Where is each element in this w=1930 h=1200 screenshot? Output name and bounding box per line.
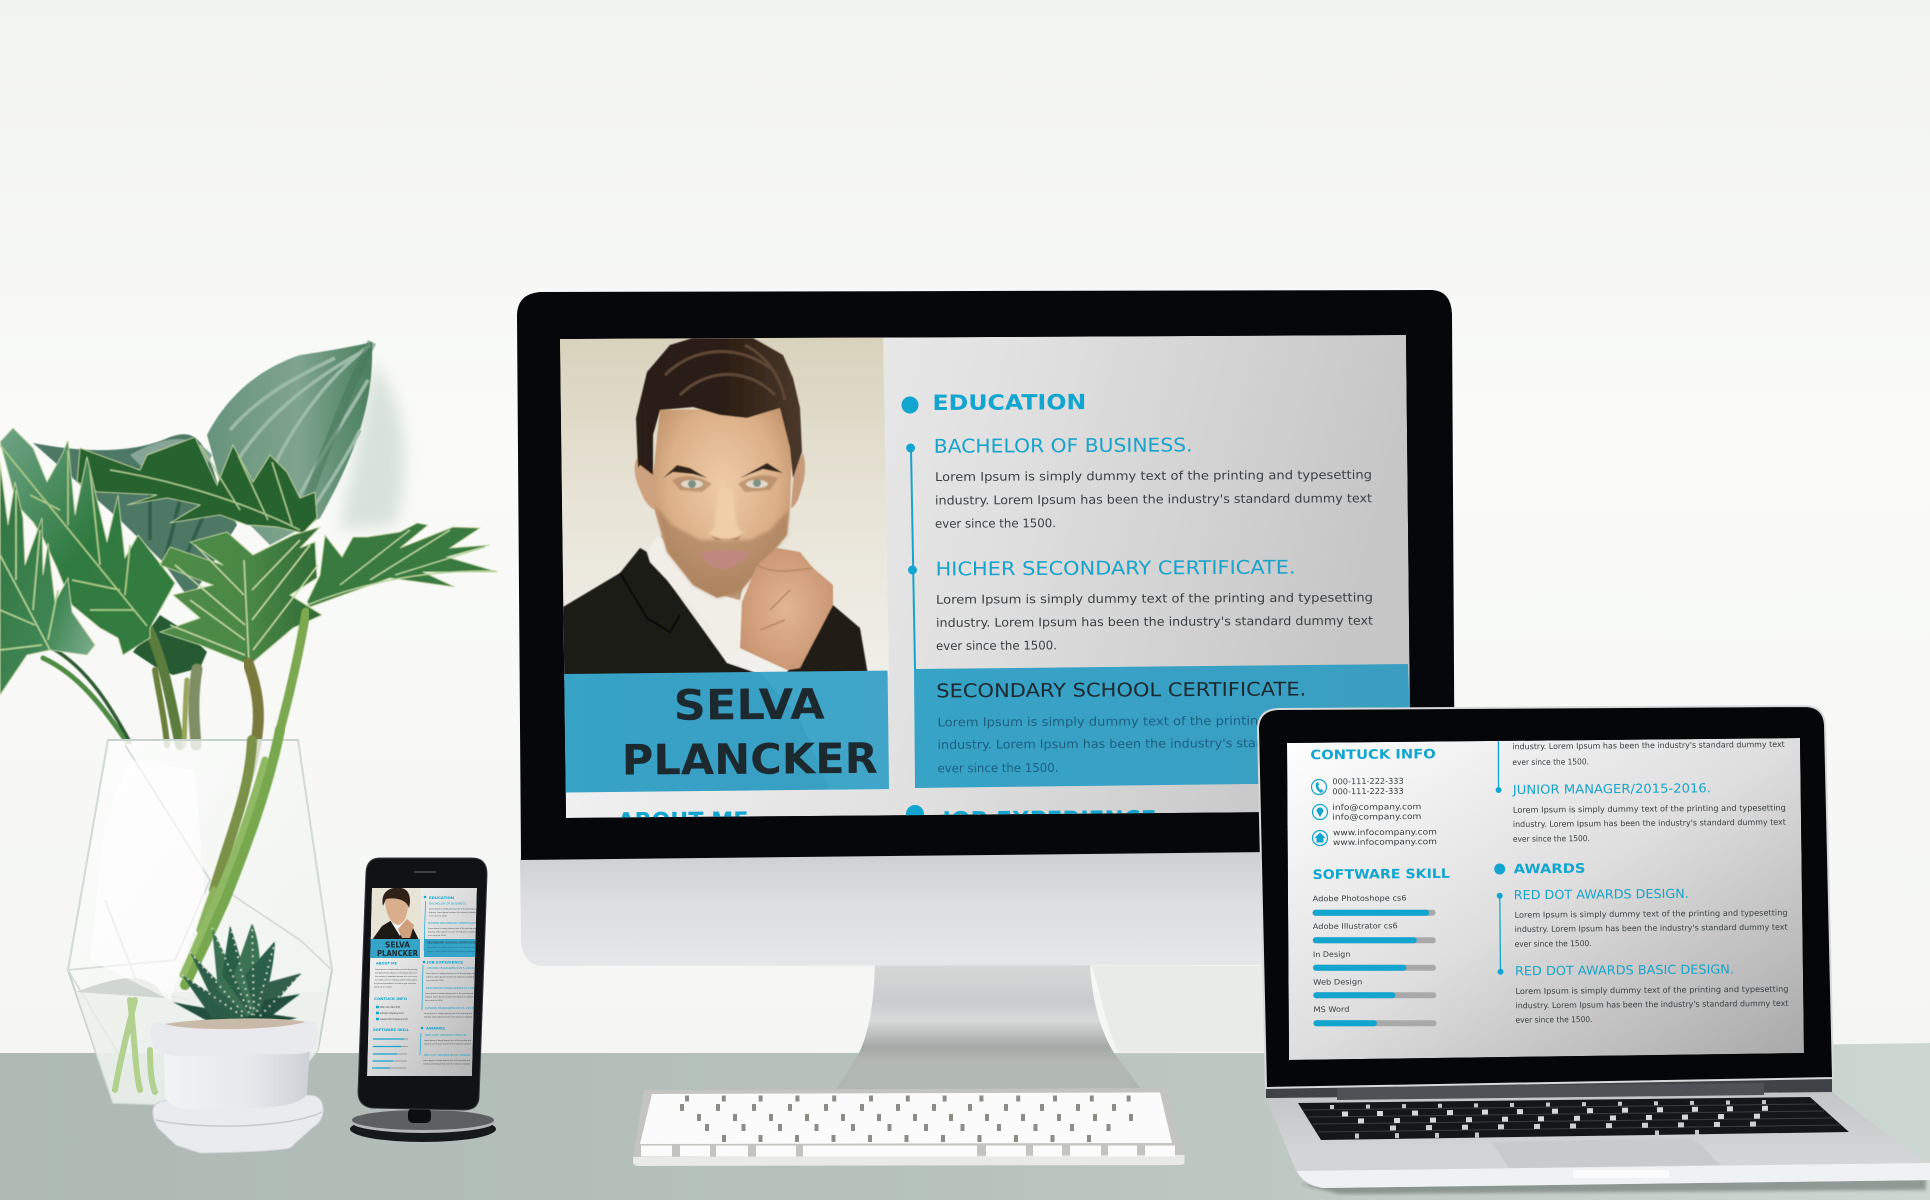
leaf: large left — [0, 428, 175, 655]
awards section: industry. Lorem Ipsum has been the industry's standard dummy text — [1515, 999, 1789, 1010]
awards section: industry. Lorem Ipsum has been the industry's standard dummy text — [1515, 923, 1788, 934]
icon: location — [1312, 804, 1328, 820]
skill: in design — [1313, 950, 1436, 971]
job experience continuation: JUNIOR MANAGER/2015-2016. — [1512, 780, 1711, 797]
leaf: center — [160, 527, 322, 663]
contact info: info@company.com — [1332, 802, 1422, 812]
portrait photo — [558, 336, 890, 680]
contact info — [1310, 747, 1437, 847]
mini right column: Lorem Ipsum is simply dummy text of the printing and — [426, 972, 475, 975]
stems — [43, 626, 197, 745]
monitor screen — [558, 335, 1412, 835]
icon: home — [1312, 830, 1328, 846]
mini right column: HICHER SECONDARY CERTIFICATE. — [428, 921, 477, 925]
neck shade — [660, 535, 742, 600]
mini right column: EDUCATION — [429, 896, 454, 900]
leaf: right — [307, 523, 498, 607]
face — [653, 408, 792, 598]
mini right column: ever since the 1500. — [425, 999, 443, 1002]
pot rim — [150, 1021, 318, 1056]
mini left column: Lorem Ipsum is simply dummy text of the printing — [375, 968, 418, 971]
mini right column: industry. Lorem Ipsum has been the industry's standard — [423, 1062, 471, 1066]
gravel — [165, 1018, 305, 1029]
awards section: Lorem Ipsum is simply dummy text of the printing and typesetting — [1515, 985, 1789, 996]
entry: bachelor: industry. Lorem Ipsum has been the industry's standard dummy text — [935, 491, 1372, 507]
awards section: ever since the 1500. — [1515, 1015, 1593, 1025]
entry: higher secondary — [936, 557, 1373, 653]
software skill: SOFTWARE SKILL — [1313, 867, 1450, 883]
skill: illustrator — [1313, 921, 1436, 943]
eyebrows — [663, 465, 707, 478]
skill: web design: Web Design — [1313, 977, 1363, 987]
laptop front lip — [1297, 1163, 1930, 1188]
job experience continuation — [1496, 740, 1786, 844]
mini right column: SECONDARY SCHOOL CERTIFICATE. — [427, 940, 477, 944]
entry: secondary school — [938, 682, 1304, 772]
keyboard front edge — [633, 1155, 1184, 1166]
mini right column: industry. Lorem Ipsum has been the industry's standard — [425, 996, 474, 998]
plant shadow on wall — [340, 362, 405, 530]
stems through glass — [183, 730, 280, 985]
leaf: far left — [0, 462, 95, 695]
mini name band — [370, 939, 420, 958]
awards section — [1494, 862, 1789, 1025]
laptop keyboard — [1298, 1097, 1849, 1140]
mini left column: book since 1500. — [374, 986, 392, 988]
job experience continuation: industry. Lorem Ipsum has been the industry's standard dummy text — [1512, 740, 1785, 751]
mini left column: ABOUT ME — [376, 962, 398, 966]
smartphone on dock — [350, 858, 496, 1142]
section heading: EDUCATION — [932, 390, 1086, 415]
icon: phone — [1312, 780, 1326, 794]
entry: higher secondary: Lorem Ipsum is simply dummy text of the printing and typesetting — [936, 590, 1373, 607]
entry: bachelor — [934, 434, 1372, 531]
trackpad — [1492, 1138, 1721, 1168]
mini left column: 000-111-222-333 — [380, 1006, 400, 1009]
contact info: 000-111-222-333 — [1332, 787, 1404, 796]
mockup scene — [0, 290, 1930, 1200]
mini left column: www.infocompany.com — [380, 1018, 409, 1021]
monitor chin — [520, 850, 1300, 966]
ears — [635, 458, 655, 510]
contact info: www.infocompany.com — [1333, 827, 1437, 837]
skill: ms word — [1313, 1005, 1436, 1026]
awards section: ever since the 1500. — [1515, 939, 1592, 949]
center hinge — [1337, 1083, 1764, 1100]
neck and shirt — [647, 535, 743, 662]
entry: higher secondary: industry. Lorem Ipsum has been the industry's standard dummy text — [936, 614, 1373, 630]
screen background — [560, 335, 1411, 818]
mini right column: Lorem Ipsum is simply dummy text of the printing and — [424, 1039, 472, 1042]
entry: secondary school: SECONDARY SCHOOL CERTIFICATE. — [936, 678, 1306, 702]
laptop table shadow — [1300, 1178, 1926, 1194]
mini right column: industry. Lorem Ipsum has been the industry's standard — [429, 911, 478, 914]
mini right column: Lorem Ipsum is simply dummy text of the printing and — [424, 1012, 473, 1015]
suit right — [785, 605, 868, 675]
mini left column: the 1500s, when an unknown printer took a galley — [375, 978, 418, 982]
entry: secondary school: ever since the 1500. — [937, 761, 1059, 775]
mini right column: Lorem Ipsum is simply dummy text of the printing and — [427, 946, 476, 949]
section bullet — [902, 396, 918, 414]
contact info: www.infocompany.com — [1333, 837, 1437, 847]
mini right column: ever since the 1500. — [428, 934, 446, 937]
philodendron leaves — [0, 428, 498, 695]
mini right column: RED DOT AWARDS BASIC DESIGN. — [424, 1053, 471, 1057]
entry: bachelor: BACHELOR OF BUSINESS. — [934, 434, 1193, 458]
cuff — [726, 662, 787, 672]
phone screen — [367, 888, 478, 1076]
skill: ms word: MS Word — [1313, 1005, 1350, 1014]
mini right column: BACHELOR OF BUSINESS. — [429, 902, 467, 906]
timeline — [906, 444, 917, 669]
contact info: 000-111-222-333 — [1332, 777, 1404, 786]
mini right column: RED DOT AWARDS DESIGN. — [425, 1033, 467, 1037]
lapel edge — [620, 573, 680, 632]
job experience continuation: Lorem Ipsum is simply dummy text of the printing and typesetting — [1513, 803, 1786, 815]
mini left column: CONTUCK INFO — [374, 997, 407, 1001]
entry: bachelor: ever since the 1500. — [935, 516, 1056, 531]
nose highlight — [708, 488, 744, 540]
back leaves — [33, 342, 372, 675]
eyes — [681, 480, 703, 488]
mini left column: and typesetting industry. Lorem Ipsum has been — [375, 972, 418, 974]
stems joining leaves — [247, 612, 306, 780]
name: SELVA — [674, 680, 825, 730]
laptop hinge — [1266, 1078, 1832, 1098]
mini right column: industry. Lorem Ipsum has been the industry's standard — [427, 950, 476, 953]
hair — [636, 338, 802, 478]
mini name band: SELVA — [385, 940, 410, 950]
skill: web design — [1313, 977, 1436, 998]
skill: photoshop — [1313, 893, 1436, 916]
mini right column: ever since the 1500. — [426, 979, 444, 982]
mini right column: JUNIOR MANAGER/2015-2016. — [424, 1006, 475, 1010]
plant in glass vase — [0, 342, 498, 1153]
contact info: CONTUCK INFO — [1310, 747, 1436, 763]
job experience heading — [906, 805, 1154, 816]
job experience heading: JOB EXPERIENCE — [940, 807, 1157, 834]
laptop screen — [1287, 738, 1804, 1060]
software skill — [1313, 867, 1450, 1026]
mini left column: of type and scrambled it to make a type specimen — [374, 982, 417, 985]
secondary school band — [914, 664, 1412, 788]
laptop screen background — [1287, 738, 1804, 1060]
wireless keyboard — [633, 1088, 1184, 1166]
job experience continuation: industry. Lorem Ipsum has been the industry's standard dummy text — [1513, 818, 1786, 829]
laptop base — [1266, 1092, 1930, 1188]
name band: PLANCKER — [622, 734, 878, 785]
monitor stand — [836, 964, 1142, 1090]
pot body — [164, 1046, 310, 1109]
education section — [902, 390, 1375, 775]
mini left column — [372, 962, 418, 1068]
hair highlights — [665, 345, 785, 400]
mini right column: industry. Lorem Ipsum has been the industry's standard — [424, 1016, 473, 1018]
glass vase — [68, 740, 332, 1108]
mini right column: industry. Lorem Ipsum has been the industry's standard — [426, 976, 475, 978]
entry: secondary school: industry. Lorem Ipsum has been the industry's standard dummy text — [937, 736, 1375, 752]
awards section: RED DOT AWARDS DESIGN. — [1514, 886, 1689, 902]
mini right column: JUNIOR MANAGER/2015-2016. — [426, 966, 475, 970]
contact info: info@company.com — [1332, 812, 1422, 822]
mini right column: SECONDARY MANAGER/2013-2015. — [426, 986, 476, 990]
awards section: RED DOT AWARDS BASIC DESIGN. — [1515, 961, 1734, 978]
phone speaker — [414, 871, 436, 873]
mini left column: info@company.com — [380, 1012, 405, 1015]
mini right column: Lorem Ipsum is simply dummy text of the printing and — [425, 992, 474, 995]
awards section: Lorem Ipsum is simply dummy text of the printing and typesetting — [1515, 908, 1788, 920]
entry: higher secondary: ever since the 1500. — [936, 638, 1057, 653]
saucer — [153, 1094, 323, 1153]
lips — [700, 550, 751, 569]
desktop monitor — [517, 290, 1455, 1090]
monitor stand shadow on wall — [1092, 966, 1280, 1052]
desk surface — [0, 1043, 1930, 1200]
mini name band: PLANCKER — [377, 949, 418, 958]
front notch — [1573, 1170, 1669, 1178]
mini right column: Lorem Ipsum is simply dummy text of the printing and — [423, 1059, 471, 1062]
mini right column: industry. Lorem Ipsum has been the industry's standard — [428, 930, 477, 934]
mini left column: SOFTWARE SKILL — [373, 1028, 410, 1032]
mini right column: Lorem Ipsum is simply dummy text of the printing and — [429, 908, 478, 910]
suit left — [563, 548, 760, 680]
entry: bachelor: Lorem Ipsum is simply dummy text of the printing and typesetting — [935, 468, 1372, 484]
laptop — [1258, 706, 1930, 1194]
leaf: upper lobed — [77, 437, 317, 533]
succulent — [173, 923, 302, 1030]
key rows — [640, 1092, 1175, 1151]
ceramic pot — [150, 1018, 323, 1153]
entry: secondary school: Lorem Ipsum is simply dummy text of the printing and typesetting — [937, 713, 1375, 729]
name band — [564, 671, 889, 792]
laptop lid — [1258, 706, 1833, 1088]
mini right column: industry. Lorem Ipsum has been the industry's standard — [424, 1042, 472, 1046]
monitor bezel — [517, 290, 1455, 860]
dock stand — [350, 1108, 496, 1142]
mini right column: ever since the 1500. — [429, 914, 447, 918]
mini left column: the industry's standard dummy text ever since — [375, 975, 418, 978]
about me heading: ABOUT ME — [617, 808, 749, 835]
mini portrait — [371, 888, 421, 940]
mini right column: JOB EXPERIENCE — [426, 960, 464, 964]
skill: illustrator: Adobe Illustrator cs6 — [1313, 921, 1398, 931]
entry: higher secondary: HICHER SECONDARY CERTIFICATE. — [936, 557, 1296, 580]
eye shadows — [672, 475, 778, 492]
mini right column: AWARDS — [426, 1026, 445, 1030]
skill: in design: In Design — [1313, 950, 1351, 959]
phone body — [358, 858, 487, 1110]
awards section: AWARDS — [1514, 862, 1586, 877]
keyboard body — [633, 1088, 1184, 1165]
beard shadow — [655, 505, 789, 598]
hand — [740, 548, 833, 670]
mini right column — [420, 896, 478, 1066]
skill: photoshop: Adobe Photoshope cs6 — [1313, 893, 1407, 903]
job experience continuation: ever since the 1500. — [1513, 834, 1590, 844]
job experience continuation: ever since the 1500. — [1512, 757, 1589, 767]
mini right column: Lorem Ipsum is simply dummy text of the printing and — [428, 927, 477, 930]
